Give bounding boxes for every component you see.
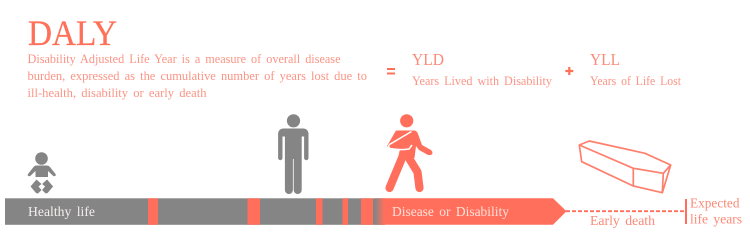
- dashed early death line: [566, 210, 685, 212]
- end marker: [685, 199, 687, 224]
- healthy life label: Healthy life: [28, 204, 95, 219]
- expected life years label: [690, 196, 742, 226]
- disease label: Disease or Disability: [392, 204, 509, 219]
- plus sign: [565, 67, 573, 75]
- healthy segment: [5, 198, 385, 225]
- disease segment: [383, 198, 566, 225]
- expected life years label: life years: [690, 212, 742, 226]
- expected life years label: Expected: [690, 196, 740, 210]
- definition text: Disability Adjusted Life Year is a measure of overall disease: [28, 52, 341, 66]
- YLD description: Years Lived with Disability: [412, 74, 553, 88]
- definition text: [28, 52, 367, 100]
- definition text: burden, expressed as the cumulative number of years lost due to: [28, 69, 367, 83]
- icon: coffin: [579, 141, 671, 193]
- definition text: ill-health, disability or early death: [28, 86, 207, 100]
- icon: adult figure: [278, 114, 308, 194]
- disease episodes: [148, 198, 373, 225]
- early death label: Early death: [590, 213, 655, 228]
- YLL heading: YLL: [590, 50, 620, 69]
- YLD heading: YLD: [412, 50, 444, 69]
- timeline bar: [5, 198, 566, 225]
- title: DALY: [28, 13, 117, 53]
- YLL description: Years of Life Lost: [590, 74, 681, 88]
- equals sign: [387, 68, 395, 74]
- icon: baby: [28, 152, 56, 194]
- icon: injured person with sling: [387, 114, 432, 188]
